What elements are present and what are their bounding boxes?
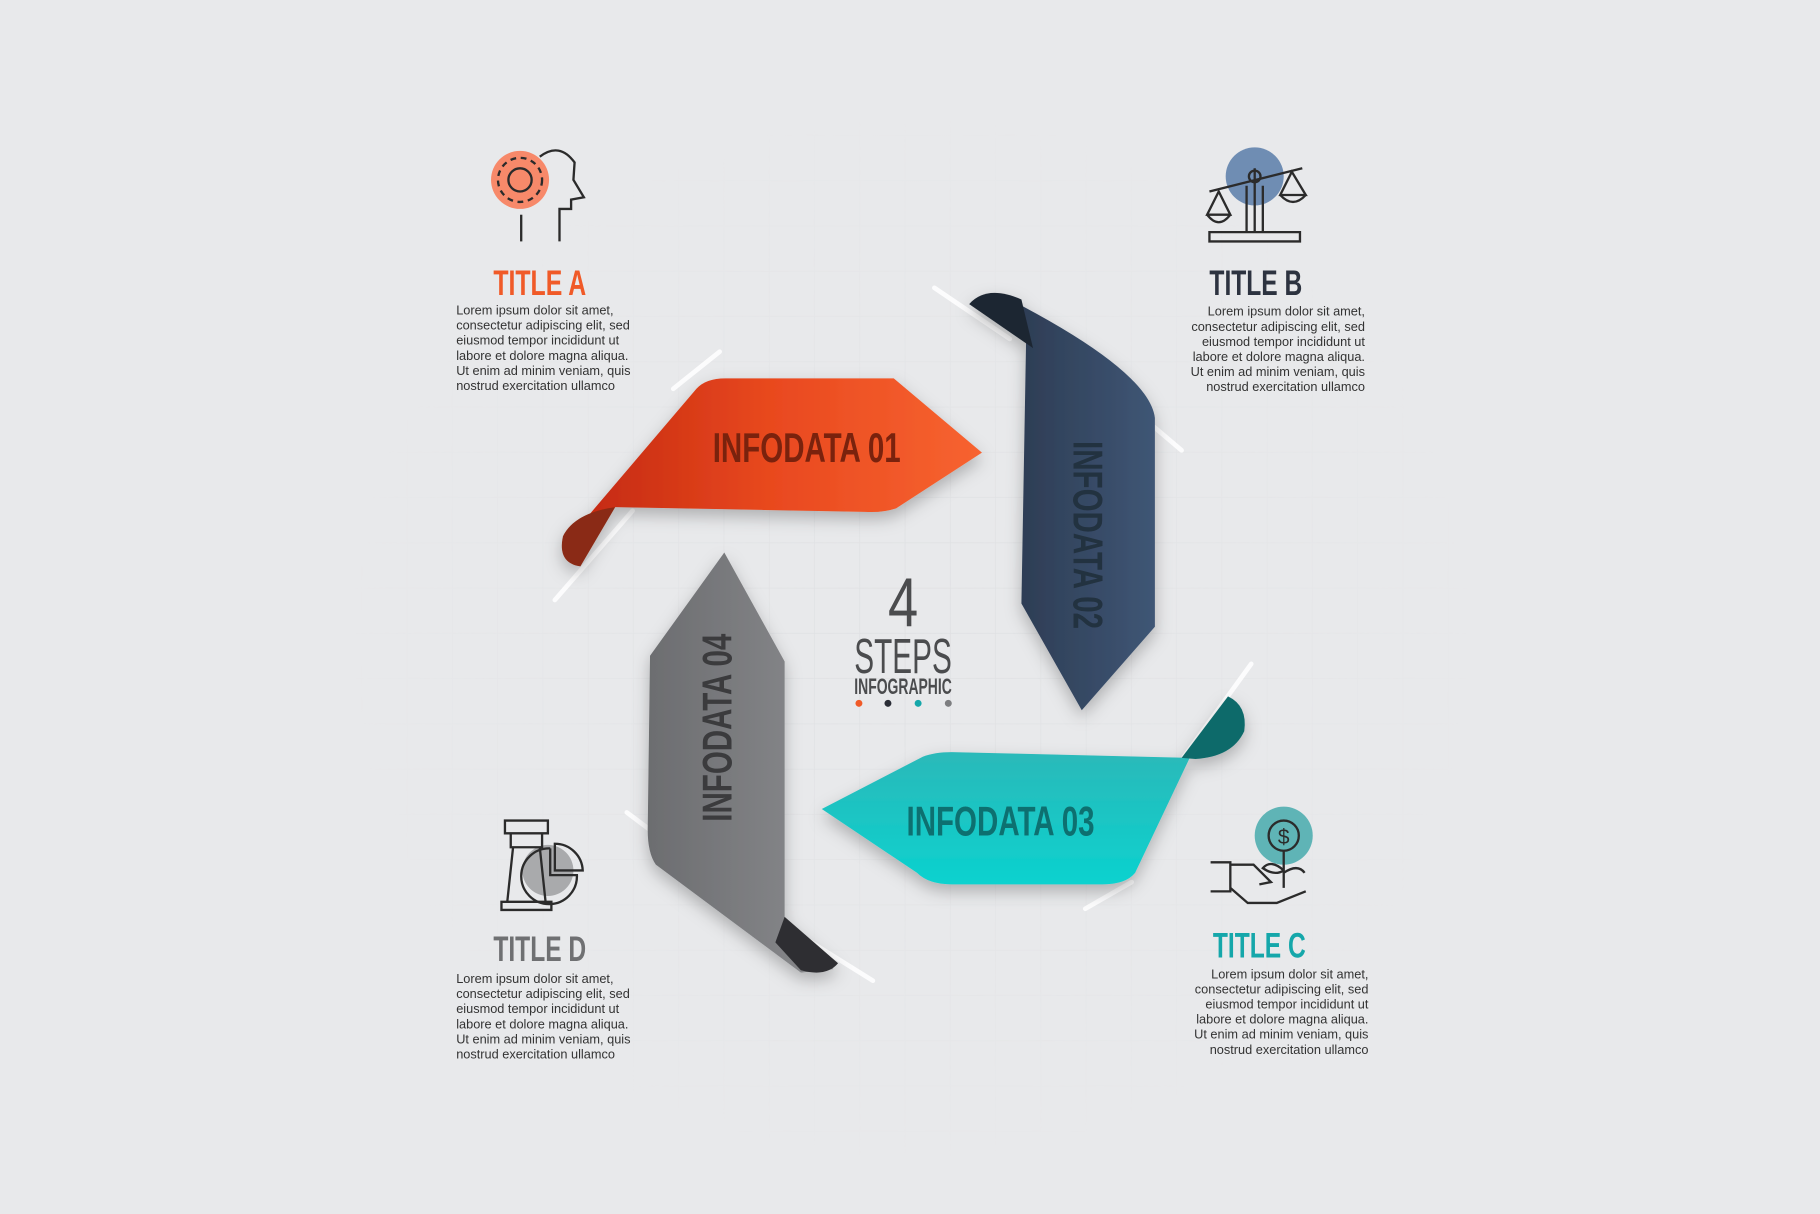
center title [854,564,952,707]
title C: nostrud exercitation ullamco [1210,1042,1368,1057]
title C [1194,927,1369,1057]
ribbon: infodata 02: INFODATA 02 [1065,441,1112,629]
title B [1191,264,1365,394]
title C: TITLE C [1213,927,1306,966]
title B: eiusmod tempor incididunt ut [1202,334,1365,349]
ribbon: infodata 03: INFODATA 03 [907,798,1095,845]
title D: TITLE D [493,930,586,969]
center title: 4 [888,564,918,642]
icon: hand with coin plant [1211,807,1313,903]
title B: Lorem ipsum dolor sit amet, [1208,304,1365,319]
title D [456,930,631,1061]
icon: chess rook with pie chart [501,821,583,910]
ribbon: infodata 01 [562,378,982,566]
title B: consectetur adipiscing elit, sed [1191,319,1365,334]
title A: labore et dolore magna aliqua. [456,348,628,363]
ribbon: infodata 03 [822,696,1245,884]
title A: nostrud exercitation ullamco [456,378,615,393]
ribbon: infodata 04: INFODATA 04 [693,634,740,822]
title D: consectetur adipiscing elit, sed [456,986,630,1001]
title C: eiusmod tempor incididunt ut [1205,997,1369,1012]
ribbon: infodata 02 [969,293,1155,710]
title D: nostrud exercitation ullamco [456,1046,615,1061]
title C: consectetur adipiscing elit, sed [1195,981,1368,996]
title A: Ut enim ad minim veniam, quis [456,363,631,378]
title B: nostrud exercitation ullamco [1206,379,1365,394]
title A: Lorem ipsum dolor sit amet, [456,303,614,318]
title B: labore et dolore magna aliqua. [1193,349,1365,364]
title A [456,264,631,393]
title C: Lorem ipsum dolor sit amet, [1211,966,1368,981]
title B: TITLE B [1209,264,1302,303]
icon: head with gear [491,150,584,241]
icon: scales [1207,147,1306,241]
title C: labore et dolore magna aliqua. [1196,1012,1368,1027]
title A: eiusmod tempor incididunt ut [456,333,620,348]
center title: INFOGRAPHIC [854,674,952,699]
title A: TITLE A [493,264,586,303]
title A: consectetur adipiscing elit, sed [456,318,630,333]
title D: Lorem ipsum dolor sit amet, [456,971,614,986]
title D: labore et dolore magna aliqua. [456,1016,628,1031]
title D: eiusmod tempor incididunt ut [456,1001,620,1016]
title B: Ut enim ad minim veniam, quis [1191,364,1365,379]
ribbon: infodata 01: INFODATA 01 [713,424,901,471]
title D: Ut enim ad minim veniam, quis [456,1031,631,1046]
title C: Ut enim ad minim veniam, quis [1194,1027,1368,1042]
icon: hand with coin plant: $ [1278,826,1290,849]
ribbon: infodata 04 [648,552,838,973]
center title: STEPS [854,630,952,684]
